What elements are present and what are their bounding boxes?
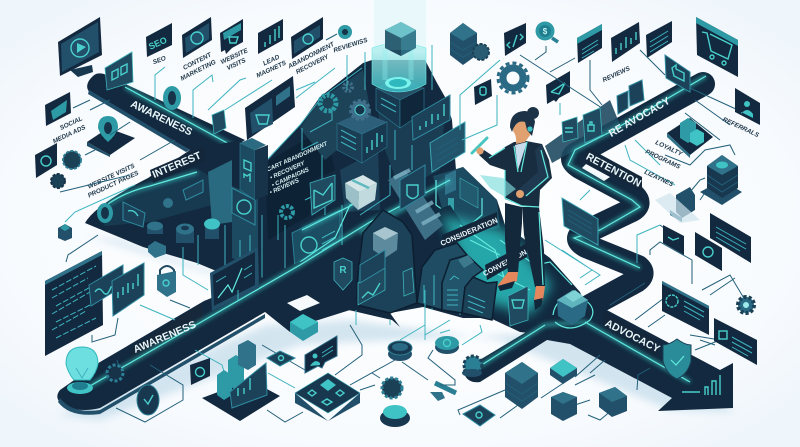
person [472,107,552,310]
mid teal side block [208,160,232,225]
icon: gear right [738,297,754,313]
thumb screen [665,55,690,92]
label: loyalty programs: LOYALTY [654,139,684,158]
shoes [498,272,518,289]
road: bottom awareness [57,180,470,415]
icon: box at crossing [557,290,588,325]
icon: small box on road [290,314,318,341]
icon: chip bottom [550,359,577,384]
labels: top row: VISITS [226,57,248,72]
screen: chart small [663,225,684,255]
icon: shield badge [137,385,159,415]
label: loyalty programs: LIZAYNES [643,169,675,189]
top row: seo screen [146,23,172,57]
road: lower right advocacy arrow [463,295,733,411]
icon: boxes platform [667,118,713,158]
icon: profile screen [305,336,337,373]
right sleeve [518,144,550,197]
bottom left: small chart screens [89,263,144,316]
icon: referral screen [735,88,760,125]
tower screens: R [339,265,347,276]
labels: top row: RECOVERY [295,53,330,76]
soft shadows [60,235,735,420]
shirt [515,142,527,170]
text: CONVERSION: CONVERSION [481,247,528,278]
text: CONSIDERATION: CONSIDERATION [439,216,499,248]
icon: gear and disc [380,378,410,427]
icon: gear screen large [662,281,709,335]
gear small [344,83,352,91]
top right: magnifier dollar: $ [543,27,548,36]
icon: chip stack [295,373,360,421]
road: interest [150,147,205,183]
bright glow lines [302,188,410,233]
icon: gear screen and gears [35,143,81,188]
labels: top row: LEAD [262,54,281,67]
tablet [480,175,516,197]
icon: gear screen small [190,358,210,385]
interest lobe [100,170,212,226]
glass cylinder and server on tower [372,0,426,128]
road tablets top left [105,52,226,134]
funnel tower dark mass [85,60,585,335]
funnel right mid [340,150,380,212]
text: tower bullet list: • RECOVERY [269,160,307,181]
icon: lock screen [714,318,757,365]
icon: search pin [326,25,352,40]
label: social media ads: MEDIA ADS [52,124,88,145]
icon: server stack bottom [505,362,538,409]
label: website visits product pages: WEBSITE VISITS [87,162,137,191]
head [512,120,531,144]
icon: parcel box [599,387,627,417]
connectors: top left [60,52,365,222]
jacket [479,141,552,208]
labels: top row: ABANDONMENT [286,41,336,71]
teal glow floor [440,215,572,315]
top left: video monitor [58,17,102,77]
label: loyalty programs: PROGRAMS [644,149,682,171]
labels: top row [152,37,369,83]
tier one [417,243,467,310]
black list panel [265,128,335,240]
funnel arcs [357,210,528,320]
icon: mail screen [546,71,570,104]
parcel box in tower [345,175,377,210]
arch panel [357,210,417,313]
top right: server and gear [450,23,489,65]
icon: gear on lower road [462,356,482,377]
top row: website cart screen [220,19,243,54]
road: top left awareness [87,73,245,160]
gear teal [320,95,336,111]
text: tower bullet list: • CART ABANDONMENT [263,141,330,175]
block left of tower [240,138,268,200]
text: tower bullet list [263,141,330,196]
conversion label bar [485,243,527,280]
tier three [462,277,497,320]
icon: megaphone screen [45,92,71,126]
icon: round switch [435,336,459,354]
label: referrals: REFERRALS [721,116,760,139]
top row: seo screen: SEO [147,35,168,52]
text: RE AVOCACY: RE AVOCACY [607,95,672,140]
icon: small device right [655,178,705,223]
icon: big gear [498,63,528,93]
icon: cart screen above road [245,76,295,140]
tier two [442,255,483,313]
ring blocks [97,180,220,258]
right lower screens [663,213,751,271]
text: tower bullet list: • REVIEWS [269,178,300,196]
connectors: top right [432,45,738,200]
bottom left: code window [45,251,103,356]
icon: diamond tile bottom [463,405,495,426]
top right: code screen [504,23,526,56]
gear grey [351,101,369,119]
label: social media ads [52,115,88,145]
icon: small diamond tile [267,351,295,366]
top row: content screen [182,17,212,58]
hair [510,111,535,136]
icon: shield [663,339,691,379]
bar chart platform [202,340,280,421]
label: reviews: REVIEWS [602,65,632,84]
labels: top row: SEO [152,55,167,66]
circuit lines [183,108,460,315]
icon: wrench [430,383,456,401]
tower screens [232,95,528,326]
top row: lead screen [258,19,283,54]
server block in tower [320,83,387,163]
labels: top row: REVIEWISS [333,37,369,54]
box on top [385,22,416,56]
stairs [388,170,443,240]
top right: magnifier dollar [536,22,558,42]
top right: shopping cart screen [696,17,738,77]
icon: line chart screen [210,247,259,311]
stylus [472,138,487,153]
icon: small chip [474,79,492,105]
icon: screen over serpentine road [562,198,598,245]
platform behind person [433,167,500,232]
text: ADVOCACY: ADVOCACY [603,317,662,355]
legs [498,203,545,310]
labels: top row: MARKETING [179,59,217,83]
icon: server stack right [700,155,742,205]
label: website visits product pages: PRODUCT PAGES [87,169,141,199]
text: INTEREST: INTEREST [151,149,204,181]
labels: top row: CONTENT [182,51,214,72]
top right: doc screens [577,21,672,63]
label: social media ads: SOCIAL [59,115,84,132]
chart screen [358,268,385,305]
top row: abandonment screen [291,17,323,59]
text: tower bullet list: • CAMPAIGNS [271,167,310,189]
small cube [58,224,72,241]
connectors: bottom right [400,225,745,420]
consideration label bar [442,212,497,248]
screen: refresh [695,232,722,271]
text: AWARENESS lower road: AWARENESS [132,319,198,356]
road: upper right re-advocacy and retention serpentine [545,76,706,306]
labels: top row: MAGNETS [255,59,288,80]
label: loyalty programs [643,139,684,189]
screen: doc [710,213,751,263]
parcel in arch [373,227,398,258]
labels: top row: WEBSITE [220,47,250,66]
icon: location pin platform [87,116,135,157]
icon: gear on road [107,365,123,381]
icon: parcel cube [551,392,577,421]
icon: coin stack [388,341,412,361]
connectors: bottom left [66,235,395,422]
text: RETENTION: RETENTION [584,151,643,190]
road tablets right [562,80,644,143]
icon: padlock [157,266,176,297]
icon: lightbulb [66,347,98,394]
text: AWARENESS upper road: AWARENESS [129,98,194,138]
